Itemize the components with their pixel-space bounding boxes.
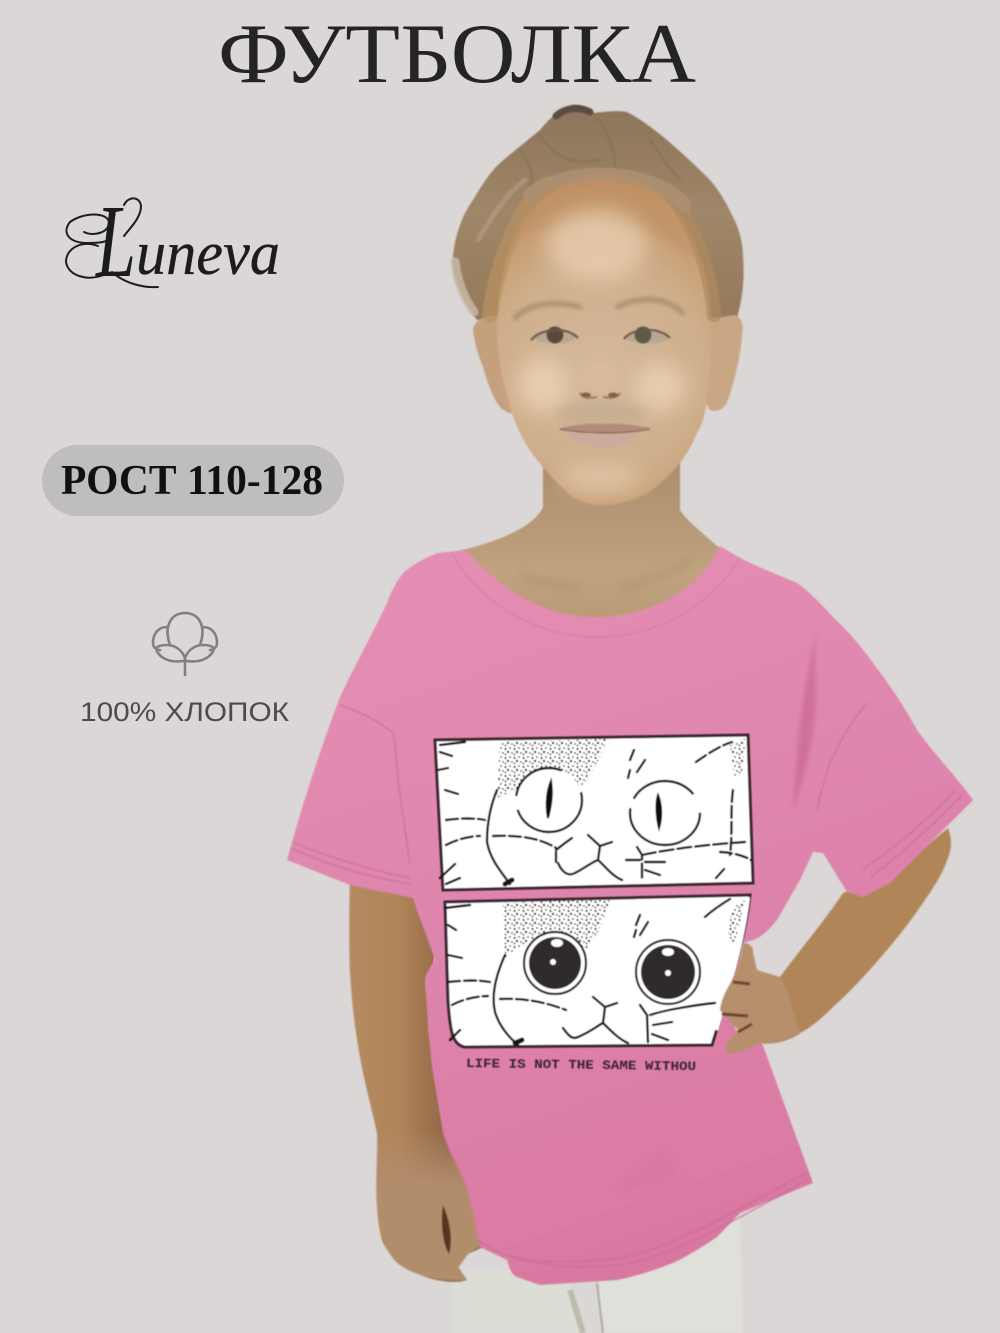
left ear bbox=[473, 315, 525, 413]
face bbox=[497, 172, 711, 505]
height badge: РОСТ 110-128 bbox=[61, 458, 323, 504]
mouth bbox=[560, 424, 650, 448]
height badge bbox=[42, 445, 344, 516]
nose bbox=[580, 362, 620, 398]
brand logo: uneva bbox=[136, 220, 280, 288]
print caption: LIFE IS NOT THE SAME WITHOU bbox=[466, 1056, 696, 1074]
shirt folds and hems bbox=[291, 703, 962, 1267]
shirt lower fold bbox=[615, 1150, 680, 1190]
bottom cat fur stipple bbox=[503, 899, 610, 958]
right arm bbox=[757, 828, 951, 1043]
hair strands bbox=[455, 109, 714, 315]
forehead tone bbox=[515, 180, 695, 260]
shirt side fold bbox=[793, 630, 817, 810]
bottom cat eyes bbox=[524, 932, 586, 994]
collarbone shading bbox=[520, 560, 690, 590]
child figure bbox=[287, 105, 973, 1333]
top cat eye whites bbox=[516, 768, 700, 845]
face highlights bbox=[517, 209, 686, 492]
cat print: bottom panel bbox=[445, 895, 750, 1047]
left arm bbox=[349, 880, 483, 1282]
bottom cat lines bbox=[445, 899, 730, 1045]
right ear bbox=[700, 315, 743, 411]
upper lip shade bbox=[555, 402, 645, 424]
eyebrows bbox=[515, 299, 683, 318]
top cat lines bbox=[438, 742, 751, 884]
right eye bbox=[624, 326, 670, 344]
brand logo bbox=[66, 184, 280, 299]
brand logo: L bbox=[95, 184, 136, 299]
material label: 100% ХЛОПОК bbox=[80, 697, 289, 727]
t-shirt bbox=[287, 546, 973, 1285]
right hand bbox=[720, 943, 800, 1053]
cat print: top panel bbox=[435, 735, 753, 890]
shirt collar seam bbox=[452, 553, 740, 637]
top cat fur stipple bbox=[497, 739, 607, 798]
top cat pupils bbox=[547, 781, 661, 828]
icon: cotton boll bbox=[153, 613, 217, 675]
title: ФУТБОЛКА bbox=[218, 7, 696, 101]
left eye bbox=[531, 326, 578, 344]
neck bbox=[455, 450, 724, 655]
hair back bbox=[453, 105, 744, 320]
trousers bbox=[452, 1215, 743, 1333]
